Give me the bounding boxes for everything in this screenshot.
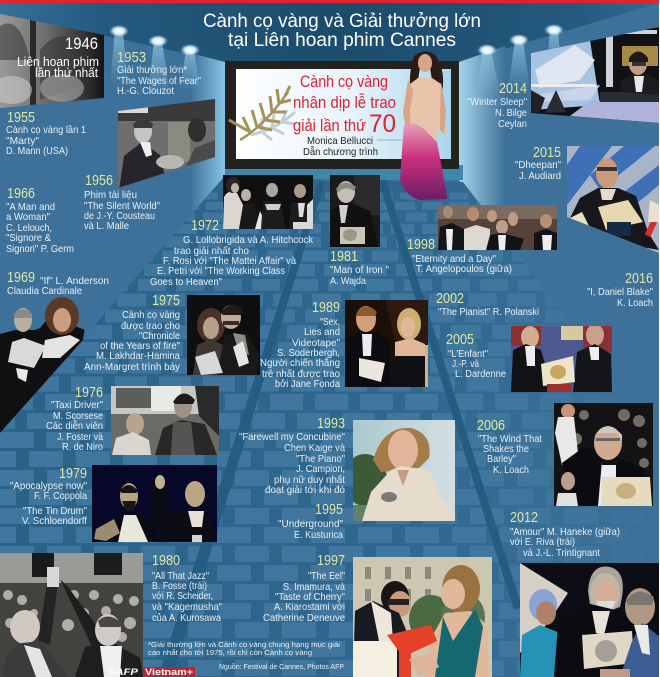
entry 1980: B. Fosse (trái)	[152, 581, 207, 592]
entry 1995	[278, 502, 343, 541]
entry 2002: 2002	[436, 291, 464, 307]
entry 1969: 1969	[7, 270, 35, 286]
entry 1997: "Taste of Cherry"	[275, 592, 345, 603]
entry 2006	[477, 418, 542, 476]
entry 1956: "The Silent World"	[84, 201, 160, 212]
entry 1956: 1956	[85, 173, 113, 189]
entry 2016: 2016	[625, 271, 653, 287]
entry 1975: được trao cho	[121, 321, 180, 332]
entry 2014: Ceylan	[498, 119, 527, 130]
photo: 1969	[0, 297, 85, 433]
entry 1975: M. Lakhdar-Hamina	[96, 351, 180, 362]
entry 2006: Barley"	[487, 454, 516, 465]
entry 1972	[150, 218, 314, 288]
entry 1989: trẻ nhất được trao	[262, 368, 340, 380]
entry 1946	[17, 35, 99, 80]
entry 1995: 1995	[315, 502, 343, 518]
entry 2005: 2005	[446, 332, 474, 348]
entry 1975: 1975	[152, 293, 180, 309]
entry 1975: Cành cọ vàng	[122, 310, 180, 321]
photo: 1972	[223, 175, 313, 229]
back wall glow	[190, 46, 505, 232]
photo: 2005	[511, 326, 612, 392]
screen: giải lần thứ	[293, 117, 366, 135]
entry 1989: Videotape"	[292, 338, 340, 349]
entry 1998	[407, 237, 512, 275]
entry 2016: K. Loach	[617, 298, 653, 309]
entry 1975: "Chronicle	[139, 331, 180, 342]
entry 2006: 2006	[477, 418, 505, 434]
entry 1980: 1980	[152, 553, 180, 569]
entry 1989: S. Soderbergh,	[277, 348, 340, 359]
entry 1993: đoạt giải tới khi đó	[265, 485, 345, 496]
entry 1980: "All That Jazz"	[152, 571, 209, 582]
photo: 1975	[187, 295, 260, 375]
entry 1966: C. Lelouch,	[6, 223, 52, 234]
entry 1966: "Signore &	[6, 233, 51, 244]
entry 1979: "The Tin Drum"	[23, 506, 87, 517]
entry 2015	[515, 145, 561, 182]
photo: 2012	[520, 563, 659, 677]
entry 1998: "Eternity and a Day"	[412, 254, 496, 265]
entry 1997: S. Imamura, và	[283, 582, 345, 593]
entry 1980: với R. Scheider,	[152, 591, 213, 602]
entry 1976: "Taxi Driver"	[51, 400, 103, 411]
entry 1989: 1989	[312, 300, 340, 316]
photo: 1946	[0, 14, 104, 108]
entry 1989	[260, 300, 340, 390]
photo: 1980	[0, 553, 143, 677]
photo: 1993	[353, 420, 455, 521]
spotlights	[109, 24, 564, 95]
entry 1972: F. Rosi với "The Mattei Affair" và	[163, 256, 296, 267]
entry 1998: T. Angelopoulos (giữa)	[416, 264, 512, 275]
footnote: *Giải thưởng lớn và Cành cọ vàng chung hạng mục giải	[148, 640, 340, 649]
entry 1972: trao giải nhất cho	[174, 245, 249, 257]
entry 2014: 2014	[499, 81, 527, 97]
entry 1946: 1946	[65, 35, 98, 53]
icon: golden palm	[229, 86, 295, 140]
footnote: cao nhất cho tới 1975, rồi chỉ còn Cành cọ vàng	[148, 648, 312, 657]
entry 2002: "The Pianist" R. Polanski	[438, 307, 539, 318]
entry 1981: A. Wajda	[330, 276, 366, 287]
aisles	[158, 180, 522, 677]
screen: 70	[369, 110, 396, 138]
entry 1976: Các diễn viên	[46, 419, 103, 432]
entry 1953	[117, 50, 201, 97]
top red bar	[0, 0, 660, 3]
photo: 1979	[92, 465, 217, 542]
title	[203, 10, 481, 51]
entry 1972: Goes to Heaven"	[150, 277, 222, 288]
entry 1993: J. Campion,	[296, 464, 345, 475]
entry 2015: J. Audiard	[519, 171, 561, 182]
entry 1995: E. Kusturica	[294, 530, 343, 541]
entry 1953: Giải thưởng lớn*	[117, 64, 187, 76]
entry 1980: của A. Kurosawa	[152, 612, 221, 624]
title: Cành cọ vàng và Giải thưởng lớn	[203, 10, 481, 32]
entry 2014: N. Bilge	[495, 108, 527, 119]
entry 2002	[436, 291, 539, 318]
entry 2006: K. Loach	[493, 465, 529, 476]
entry 2005: "L'Enfant"	[448, 349, 488, 360]
entry 2015: "Dheepan"	[515, 160, 561, 171]
entry 1976	[46, 385, 103, 453]
entry 1997: 1997	[317, 553, 345, 569]
entry 1972: G. Lollobrigida và A. Hitchcock	[183, 235, 314, 246]
entry 1972: E. Petri với "The Working Class	[157, 266, 285, 277]
logo: Vietnam+: Vietnam+	[145, 667, 193, 677]
entry 2006: Shakes the	[483, 444, 529, 455]
entry 1955: 1955	[7, 110, 35, 126]
entry 1953: 1953	[117, 50, 146, 66]
entry 1969	[7, 270, 109, 297]
entry 1966: 1966	[7, 186, 35, 202]
entry 1981: "Man of Iron "	[330, 265, 389, 276]
entry 1975: of the Years of fire"	[100, 341, 180, 352]
title: tại Liên hoan phim Cannes	[228, 29, 456, 51]
photo: Monica Bellucci	[400, 52, 448, 200]
entry 1989: Người chiến thắng	[260, 356, 340, 369]
entry 1979: 1979	[59, 466, 87, 482]
entry 1976: R. de Niro	[62, 442, 103, 453]
entry 2005: L. Dardenne	[455, 369, 506, 380]
entry 1969: "If" L. Anderson	[40, 276, 109, 287]
entry 2016: "I, Daniel Blake"	[587, 287, 653, 298]
entry 1981	[330, 249, 389, 287]
entry 1979: "Apocalypse now"	[10, 481, 87, 492]
entry 1955: D. Mann (USA)	[6, 146, 68, 157]
entry 1997: A. Kiarostami với	[274, 602, 345, 613]
entry 1980	[152, 553, 222, 624]
photo: 2015	[567, 146, 659, 254]
entry 1969: Claudia Cardinale	[7, 286, 82, 297]
entry 1976: 1976	[75, 385, 103, 401]
entry 2012: và J.-L. Trintignant	[523, 548, 600, 559]
logo: AFP: ©AFP	[107, 667, 139, 677]
entry 2012: với E. Riva (trái)	[510, 537, 575, 548]
entry 1993: 1993	[317, 416, 345, 432]
photo: 2014	[531, 27, 659, 123]
photo: 2006	[554, 403, 653, 506]
entry 1993: phụ nữ duy nhất	[274, 474, 345, 486]
entry 1989: "Sex,	[320, 317, 340, 328]
entry 1995: "Underground"	[278, 519, 343, 530]
entry 2012: "Amour" M. Haneke (giữa)	[510, 527, 620, 538]
entry 1998: 1998	[407, 237, 435, 253]
screen	[225, 61, 459, 169]
footnote	[148, 640, 340, 657]
entry 1953: H.-G. Clouzot	[117, 86, 174, 97]
entry 1955: "Marty"	[6, 136, 39, 147]
entry 1955: Cành cọ vàng lần 1	[6, 124, 86, 136]
entry 1956	[84, 173, 160, 232]
entry 1993: Chen Kaige và	[284, 443, 345, 454]
entry 1975: Ann-Margret trình bày	[84, 362, 181, 373]
entry 1997: Catherine Deneuve	[263, 613, 345, 624]
floor with seats	[0, 178, 518, 677]
photo: 1981	[330, 175, 380, 247]
entry 1946: lần thứ nhất	[35, 66, 98, 80]
entry 1956: và L. Malle	[84, 221, 129, 232]
entry 1997	[263, 553, 345, 624]
entry 2012: 2012	[510, 510, 538, 526]
entry 1989: bởi Jane Fonda	[275, 378, 340, 390]
entry 1955	[6, 110, 86, 157]
photo: 1976	[111, 386, 219, 455]
entry 1953: "The Wages of Fear"	[117, 76, 201, 87]
entry 1946: Liên hoan phim	[17, 55, 99, 69]
entry 2006: "The Wind That	[478, 434, 542, 445]
entry 1979: V. Schloendorff	[22, 516, 87, 527]
photo: 1998	[438, 205, 557, 250]
entry 1997: "The Eel"	[308, 571, 345, 582]
entry 1966: a Woman"	[6, 212, 50, 223]
screen: Cành cọ vàng	[300, 73, 388, 91]
entry 1993	[239, 416, 345, 496]
entry 1980: và "Kagemusha"	[152, 602, 222, 613]
entry 1966: "A Man and	[6, 202, 55, 213]
entry 2016	[587, 271, 653, 309]
entry 1966	[6, 186, 74, 255]
entry 1956: de J.-Y. Cousteau	[84, 211, 155, 222]
photo: 1997	[353, 557, 492, 677]
entry 1956: Phim tài liệu	[84, 190, 137, 201]
entry 1993: "Farewell my Concubine"	[239, 432, 345, 443]
screen: nhân dịp lễ trao	[293, 93, 396, 112]
photo: 1989	[345, 300, 428, 387]
entry 1972: 1972	[191, 218, 219, 234]
entry 1976: J. Foster và	[57, 432, 103, 443]
photo: 1956	[118, 99, 215, 190]
entry 1979	[10, 466, 87, 527]
entry 2015: 2015	[533, 145, 561, 161]
entry 2014: "Winter Sleep"	[467, 97, 527, 108]
entry 2005	[446, 332, 506, 380]
screen: Dẫn chương trình	[303, 145, 378, 158]
entry 1979: F. F. Coppola	[34, 491, 87, 502]
entry 1976: M. Scorsese	[53, 411, 103, 422]
entry 1989: Lies and	[304, 327, 340, 338]
entry 2014	[467, 81, 527, 130]
ceiling	[0, 3, 660, 62]
right page edge	[659, 0, 660, 677]
source line: Nguồn: Festival de Cannes, Photos AFP	[219, 662, 344, 671]
screen: Monica Bellucci	[307, 136, 373, 147]
entry 1993: "The Piano"	[296, 454, 345, 465]
entry 1981: 1981	[330, 249, 358, 265]
entry 1966: Signori" P. Germ	[6, 244, 74, 255]
entry 2005: J.-P. và	[452, 359, 479, 370]
entry 1975	[84, 293, 181, 373]
entry 2012	[510, 510, 620, 559]
